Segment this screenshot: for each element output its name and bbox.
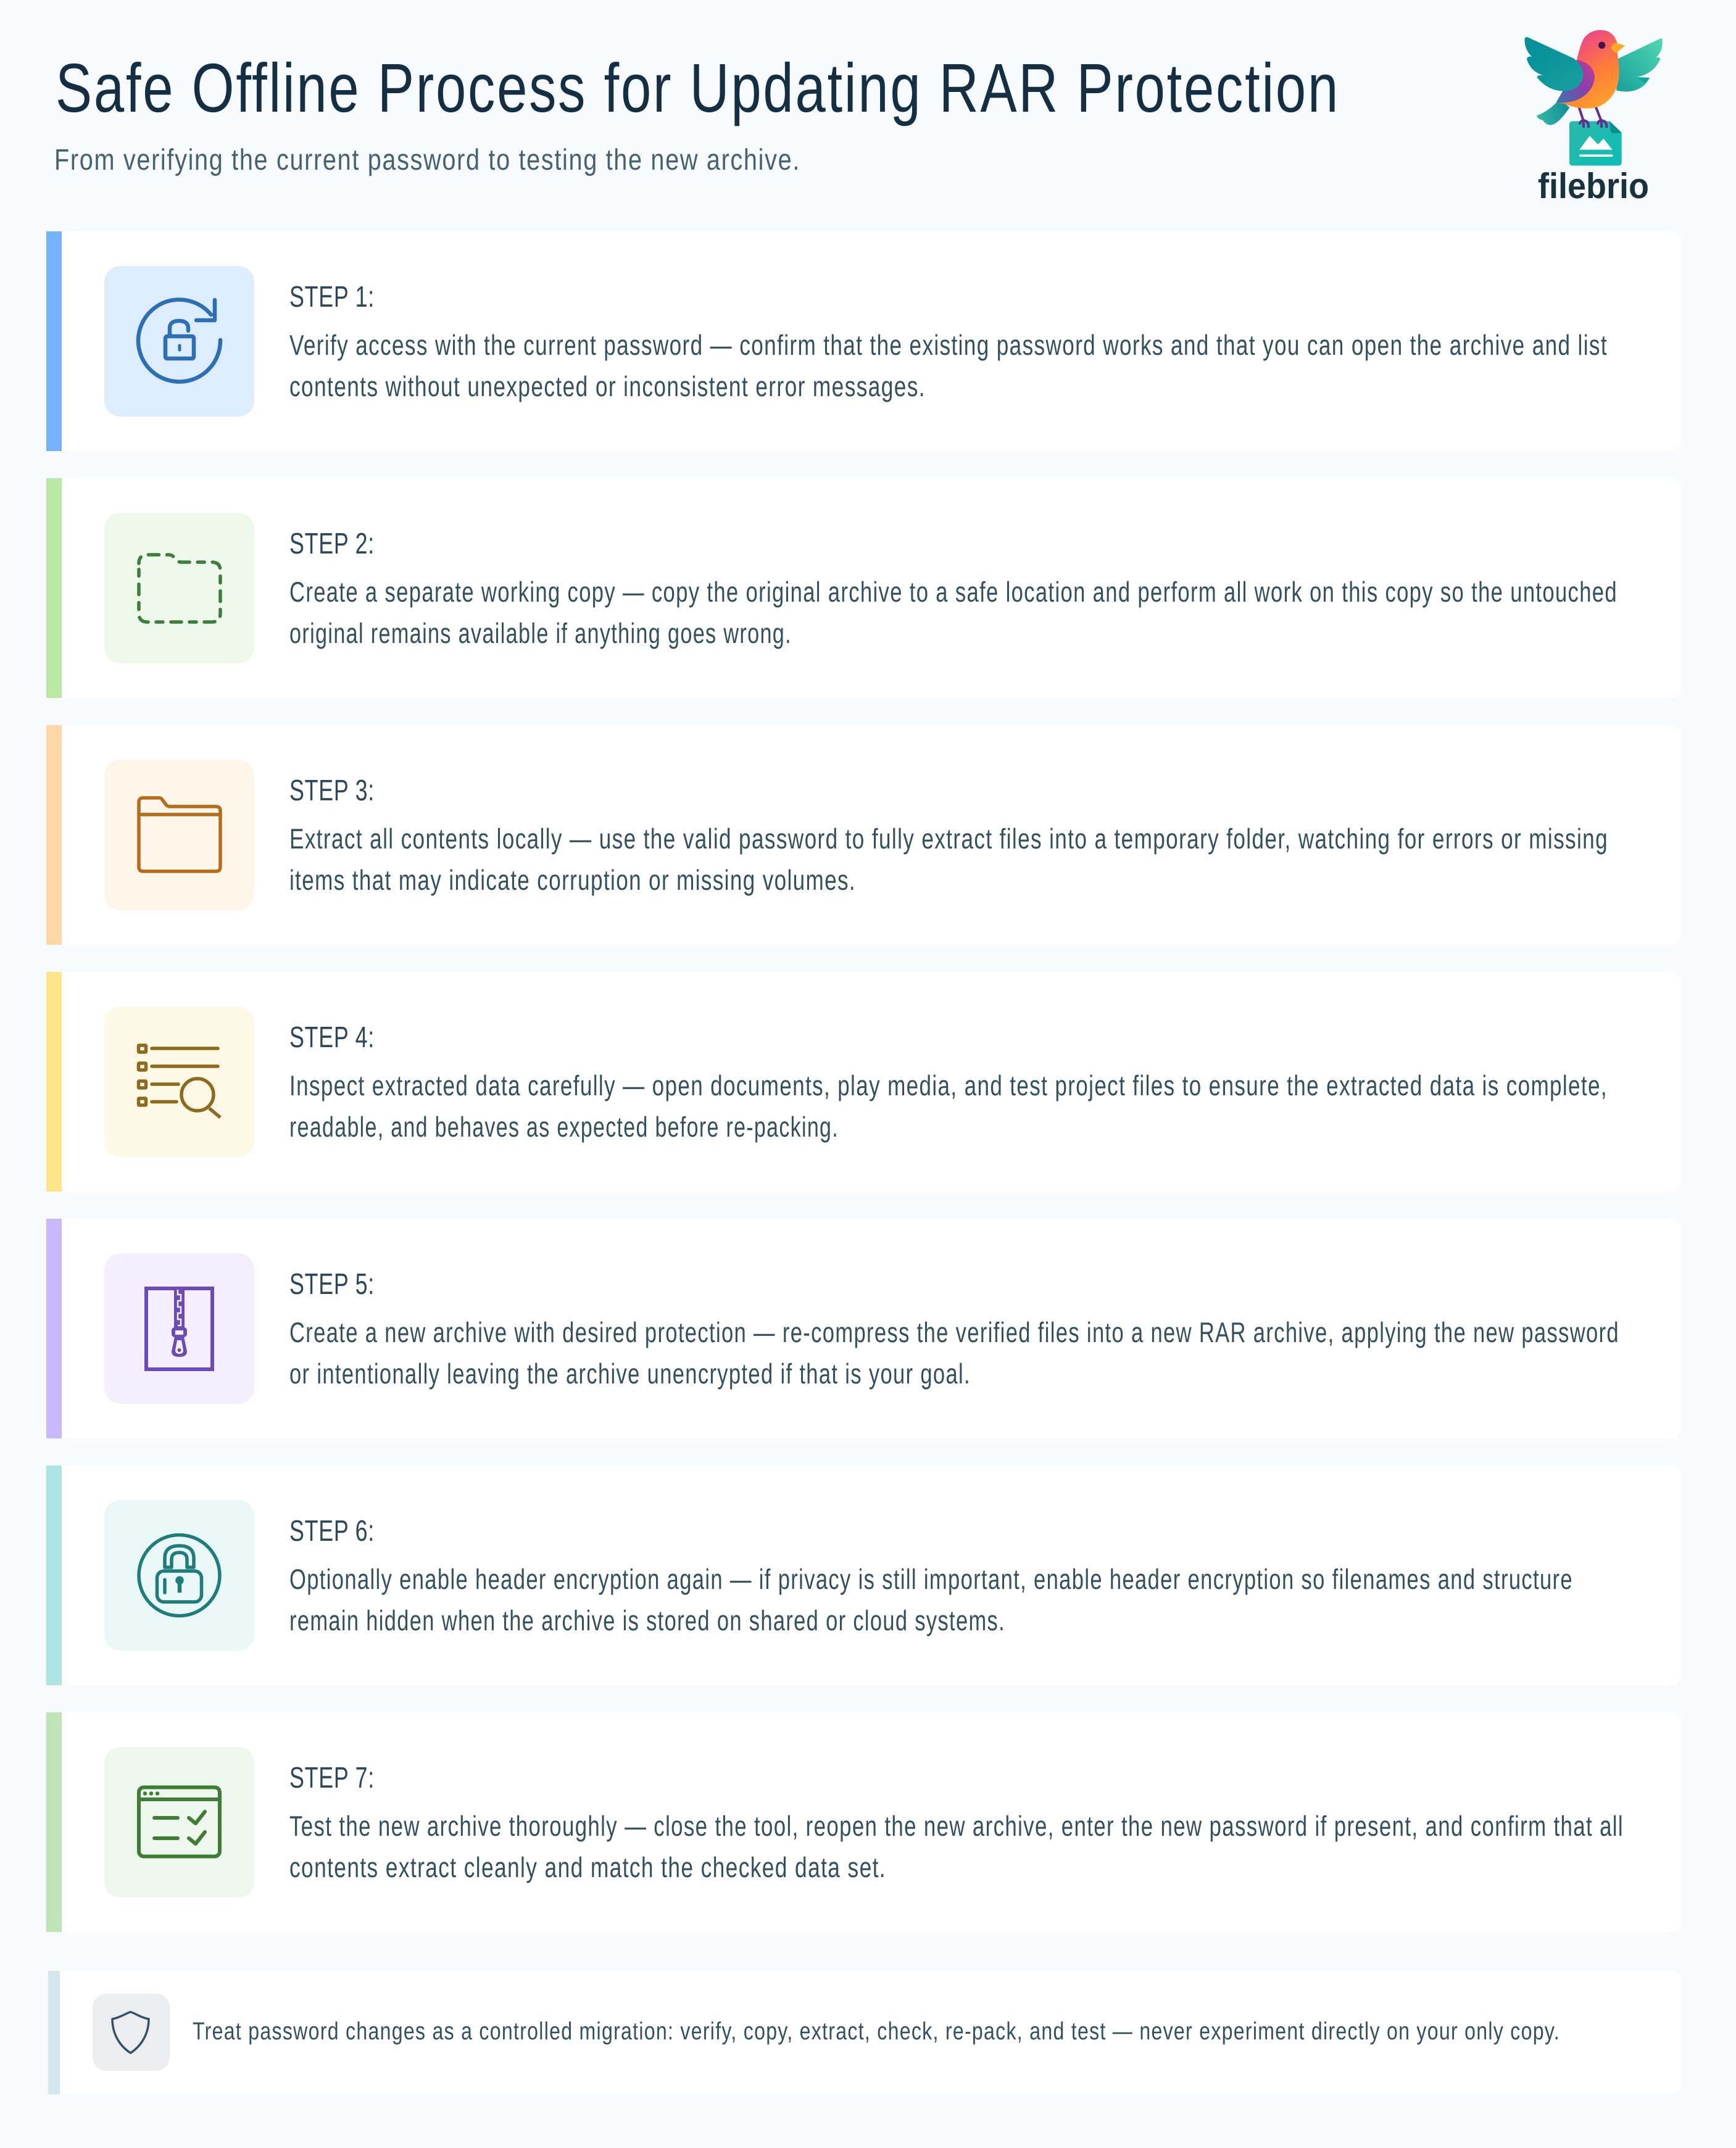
panel: step 6	[46, 1466, 1682, 1685]
icon: refresh with open lock	[138, 300, 220, 382]
accent bar	[48, 1971, 60, 2094]
card	[49, 231, 1682, 451]
icon tile	[104, 1253, 254, 1404]
panel: step 4	[46, 972, 1682, 1192]
icon: locked padlock in circle	[139, 1535, 220, 1615]
accent bar	[46, 1219, 62, 1438]
card	[49, 1712, 1682, 1932]
step description: remain hidden when the archive is stored on shared or cloud systems.	[289, 1604, 1005, 1636]
icon tile	[104, 760, 254, 910]
icon: checklist window	[139, 1787, 220, 1856]
accent bar	[46, 725, 62, 945]
card	[49, 725, 1682, 945]
step description: items that may indicate corruption or missing volumes.	[289, 864, 856, 896]
card	[49, 478, 1682, 698]
subtitle: From verifying the current password to testing the new archive.	[54, 144, 800, 176]
step label: STEP 7:	[289, 1762, 375, 1794]
step description: contents extract cleanly and match the checked data set.	[289, 1851, 886, 1883]
bird and file artwork	[1525, 30, 1663, 165]
step description	[289, 1069, 1608, 1143]
wordmark: filebrio	[1538, 166, 1649, 206]
step label: STEP 3:	[289, 774, 375, 807]
panel: step 1	[46, 231, 1682, 451]
icon: checklist with magnifier	[138, 1045, 220, 1118]
accent bar	[46, 231, 62, 451]
icon tile	[104, 1500, 254, 1651]
icon tile	[104, 513, 254, 663]
step label: STEP 4:	[289, 1021, 375, 1054]
card	[52, 1971, 1682, 2094]
accent bar	[46, 1712, 62, 1932]
step description	[289, 1810, 1624, 1883]
icon: dashed folder	[139, 555, 220, 622]
accent bar	[46, 972, 62, 1192]
header	[54, 49, 1340, 176]
icon: folder	[139, 798, 220, 871]
step label: STEP 5:	[289, 1268, 375, 1301]
logo: filebrio bird on file	[1525, 30, 1663, 206]
step description	[289, 576, 1618, 649]
step description: original remains available if anything goes wrong.	[289, 617, 792, 649]
step label: STEP 2:	[289, 528, 375, 560]
card	[49, 1219, 1682, 1438]
title: Safe Offline Process for Updating RAR Protection	[56, 49, 1340, 126]
card	[49, 1466, 1682, 1685]
icon: zip archive	[146, 1288, 212, 1369]
icon tile	[104, 266, 254, 417]
step description	[289, 329, 1608, 402]
panel: step 7	[46, 1712, 1682, 1932]
step description	[289, 1563, 1573, 1636]
accent bar	[46, 1466, 62, 1685]
panel: step 5	[46, 1219, 1682, 1438]
step description	[289, 1316, 1619, 1390]
step description	[289, 823, 1608, 896]
step description: readable, and behaves as expected before re-packing.	[289, 1111, 839, 1143]
panel: step 2	[46, 478, 1682, 698]
card	[49, 972, 1682, 1192]
step label: STEP 1:	[289, 281, 375, 313]
step description: contents without unexpected or inconsistent error messages.	[289, 370, 926, 402]
icon: shield	[112, 2012, 149, 2053]
icon tile	[93, 1994, 170, 2071]
icon tile	[104, 1006, 254, 1157]
panel: closing note	[48, 1971, 1682, 2094]
step label: STEP 6:	[289, 1515, 375, 1548]
step description: or intentionally leaving the archive unencrypted if that is your goal.	[289, 1358, 971, 1390]
panel: step 3	[46, 725, 1682, 945]
accent bar	[46, 478, 62, 698]
icon tile	[104, 1747, 254, 1897]
